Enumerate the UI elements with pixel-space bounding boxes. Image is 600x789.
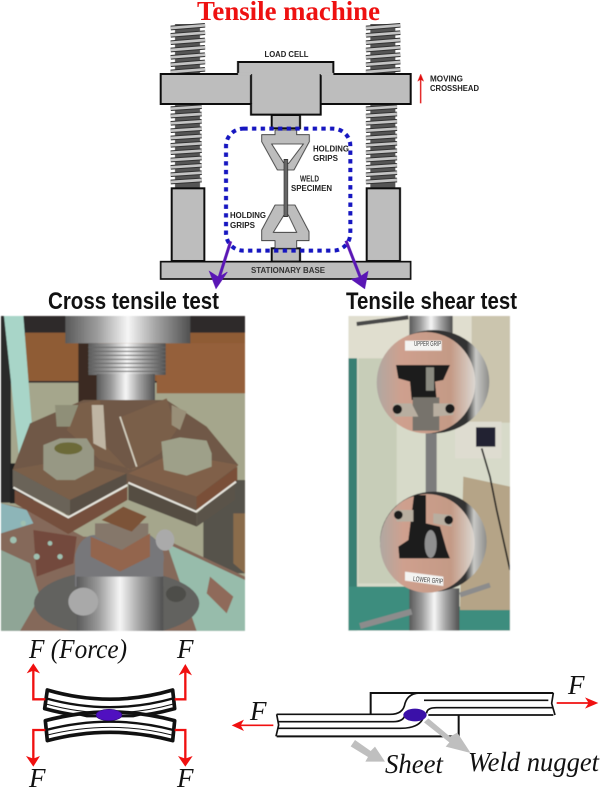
right screw <box>366 24 400 188</box>
dotted outline <box>226 129 350 251</box>
upper disk <box>377 330 489 433</box>
upper sheet <box>45 690 175 718</box>
top and bottom rods <box>409 316 453 336</box>
grey pointer: weld nugget <box>424 718 471 753</box>
holding grips lower: HOLDING <box>230 211 266 220</box>
lower sheet <box>45 712 175 741</box>
weld specimen label: WELD <box>300 174 319 184</box>
connector upper <box>272 115 300 128</box>
nuts <box>55 405 78 427</box>
arrow left purple <box>209 241 231 289</box>
weld nugget label: Weld nugget <box>468 747 600 777</box>
F upper right: F <box>176 634 194 664</box>
upper grip <box>262 130 309 170</box>
upper grip label: UPPER GRIP <box>414 341 441 348</box>
diagram labels <box>230 50 479 275</box>
sheet label: Sheet <box>385 749 444 779</box>
specimen strip <box>426 433 437 495</box>
crosshead label: CROSSHEAD <box>430 84 479 93</box>
F right: F <box>567 670 585 700</box>
force arrows <box>240 703 590 725</box>
photo labels <box>413 341 444 586</box>
tensile machine diagram <box>161 24 424 289</box>
frames <box>371 693 553 715</box>
shear labels <box>249 670 600 779</box>
lower grip label: LOWER GRIP <box>413 576 444 586</box>
photo: tensile shear fixture <box>337 310 523 641</box>
lower disk <box>380 492 487 592</box>
connector lower <box>272 248 300 262</box>
photo: cross tensile fixture <box>0 316 250 641</box>
stationary base label: STATIONARY BASE <box>251 266 326 275</box>
crosshead and load cell <box>161 62 411 115</box>
heading: cross tensile test: Cross tensile test <box>48 288 219 315</box>
heading: tensile shear test: Tensile shear test <box>346 288 517 315</box>
cross tensile schematic <box>26 663 193 767</box>
sheets <box>276 693 555 736</box>
F force label: F (Force) <box>28 634 127 664</box>
lower grip <box>262 205 309 248</box>
load cell label: LOAD CELL <box>264 50 309 59</box>
diagram labels: GRIPS <box>313 154 339 163</box>
force arrows <box>33 667 185 760</box>
arrow right purple <box>346 241 368 289</box>
plates <box>13 400 238 515</box>
table <box>1 503 245 631</box>
F left: F <box>249 696 267 726</box>
tensile shear schematic <box>232 693 598 762</box>
diagram labels: SPECIMEN <box>291 184 332 193</box>
columns <box>172 188 204 261</box>
grey pointer: sheet <box>351 740 385 762</box>
base <box>161 262 411 279</box>
shaft and threads <box>65 316 190 343</box>
force labels <box>28 634 194 789</box>
diagram labels: GRIPS <box>230 221 256 230</box>
left screw <box>171 24 205 188</box>
wall socket and adapter <box>455 422 502 458</box>
weld nugget <box>403 709 427 721</box>
specimen <box>284 159 288 217</box>
holding grips upper: HOLDING <box>313 144 349 154</box>
weld nugget <box>96 709 122 721</box>
lower fixture <box>34 570 199 637</box>
moving arrow <box>418 74 424 103</box>
moving crosshead label: MOVING <box>430 74 463 84</box>
